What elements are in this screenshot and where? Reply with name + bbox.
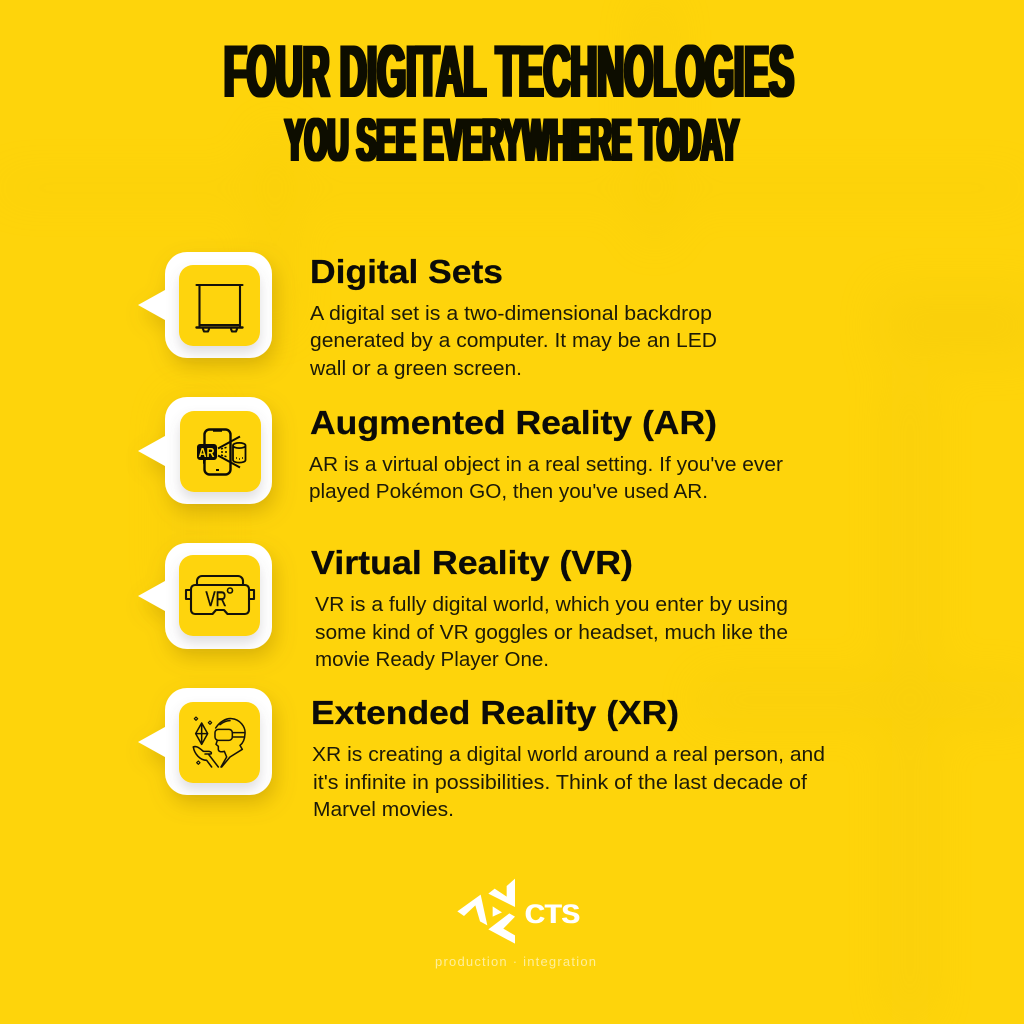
logo wordmark: CTS [525, 899, 580, 929]
description: extended reality: XR is creating a digital world around a real person, and [312, 744, 825, 766]
icon: XR person with headset [193, 717, 245, 767]
description: extended reality [312, 744, 825, 821]
icon: projection screen [196, 285, 242, 332]
heading: extended reality: Extended Reality (XR) [311, 695, 679, 732]
panel: augmented reality [138, 397, 783, 504]
icon: VR goggles [186, 576, 254, 614]
description: extended reality: Marvel movies. [313, 799, 454, 821]
logo mark [457, 879, 515, 944]
description: digital sets: A digital set is a two-dimensional backdrop [310, 303, 712, 325]
description: virtual reality [315, 594, 788, 671]
panel: virtual reality [138, 543, 788, 671]
description: virtual reality: VR is a fully digital world, which you enter by using [315, 594, 788, 616]
logo: CTS [435, 879, 596, 969]
heading: digital sets: Digital Sets [310, 254, 503, 291]
panel: digital sets [138, 252, 717, 380]
speech bubble card [138, 688, 272, 795]
description: augmented reality: AR is a virtual object in a real setting. If you've ever [309, 454, 783, 476]
description: digital sets [309, 303, 717, 380]
icon: VR goggles: VR [206, 588, 226, 611]
speech bubble card [138, 252, 272, 358]
description: augmented reality: played Pokémon GO, then you've used AR. [309, 481, 708, 503]
description: digital sets: generated by a computer. It may be an LED [310, 330, 717, 352]
description: virtual reality: movie Ready Player One. [315, 649, 549, 671]
description: digital sets: wall or a green screen. [309, 358, 522, 380]
description: virtual reality: some kind of VR goggles or headset, much like the [315, 622, 788, 644]
panel: extended reality [138, 688, 825, 821]
icon: AR phone [197, 430, 246, 474]
heading: augmented reality: Augmented Reality (AR) [310, 405, 717, 442]
title [224, 32, 794, 174]
description: extended reality: it's infinite in possibilities. Think of the last decade of [313, 772, 807, 794]
speech bubble card [138, 543, 272, 649]
speech bubble card [138, 397, 272, 504]
heading: virtual reality: Virtual Reality (VR) [311, 545, 633, 582]
logo tagline: production · integration [435, 954, 596, 969]
icon: AR phone: AR [198, 446, 214, 460]
description: augmented reality [309, 454, 783, 503]
